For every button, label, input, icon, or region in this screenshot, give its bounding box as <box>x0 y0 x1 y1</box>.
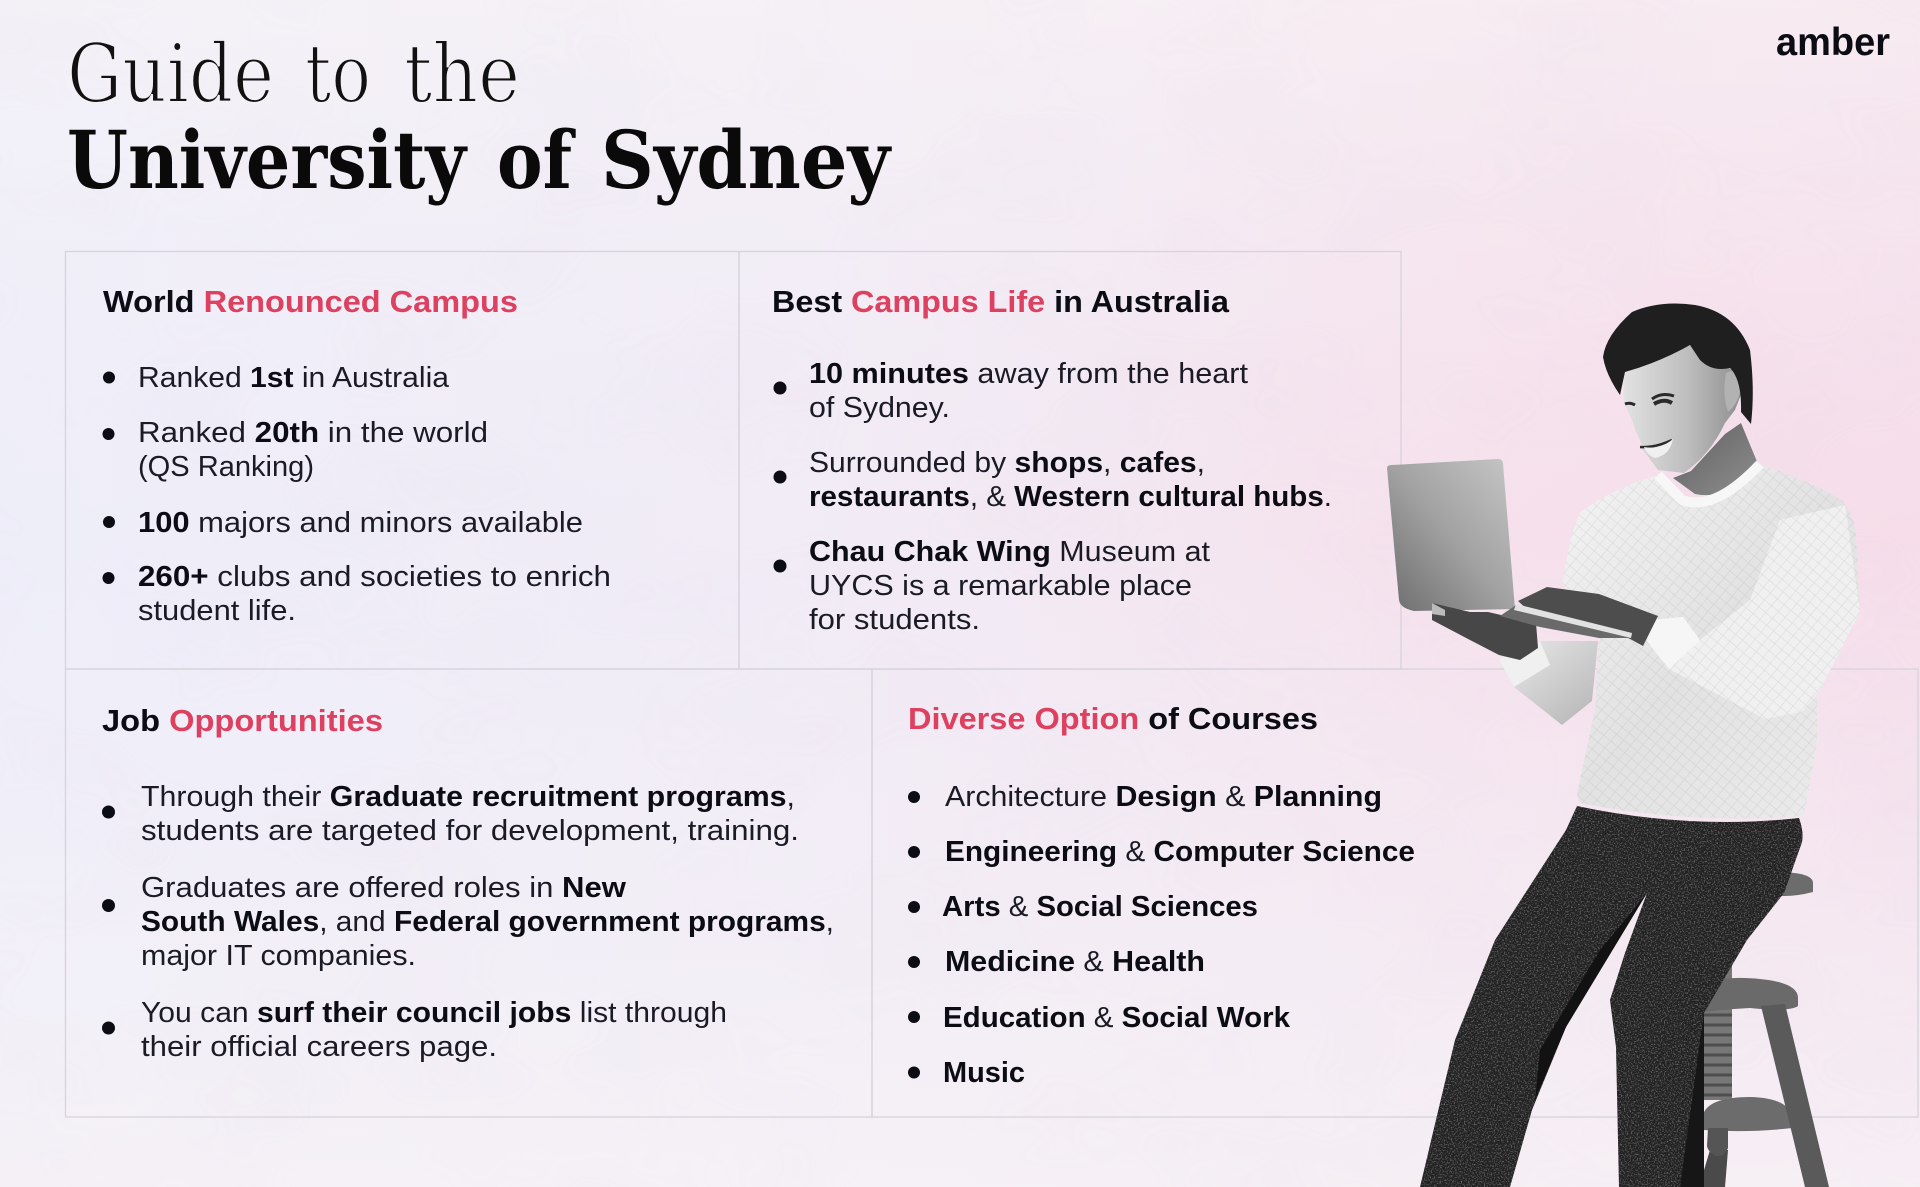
title: to <box>305 28 371 122</box>
item: Chau Chak Wing: for students. <box>809 604 980 636</box>
item: music <box>908 1057 1025 1089</box>
item: graduates roles: Graduates are offered roles in New <box>141 872 626 904</box>
panel: Diverse Option of Courses <box>872 669 1918 1117</box>
item: 260+ clubs <box>102 561 611 627</box>
heading: World Renounced Campus: World Renounced Campus <box>103 284 518 319</box>
title <box>67 28 892 207</box>
title: Sydney <box>601 113 892 207</box>
heading: Job Opportunities: Job Opportunities <box>102 703 383 738</box>
face details <box>1625 395 1674 447</box>
collar <box>1658 464 1760 502</box>
item: graduate recruitment: Through their Graduate recruitment programs , <box>141 781 795 813</box>
title: of <box>497 113 576 207</box>
item: 260+ clubs: student life. <box>138 595 296 627</box>
hair <box>1603 304 1753 424</box>
item: medicine: Medicine & Health <box>945 946 1205 978</box>
item: graduates roles: major IT companies. <box>141 940 416 972</box>
heading: Diverse Option of Courses: Diverse Option of Courses <box>908 701 1318 736</box>
item: ranked 20th: (QS Ranking) <box>138 451 314 483</box>
item: ranked 1st: Ranked 1st in Australia <box>138 362 450 394</box>
item: ranked 20th: Ranked 20th in the world <box>138 417 488 449</box>
panel: World Renounced Campus <box>66 252 739 669</box>
item: ranked 20th <box>102 417 488 483</box>
title: University <box>67 113 468 207</box>
panel: Best Campus Life <box>739 252 1401 669</box>
stool <box>1699 872 1829 1187</box>
sweater <box>1562 464 1860 819</box>
item: 100 majors: 100 majors and minors available <box>138 507 583 539</box>
neck <box>1673 423 1758 495</box>
title: the <box>404 28 520 122</box>
laptop screen <box>1387 459 1515 611</box>
item: Chau Chak Wing: UYCS is a remarkable place <box>809 570 1192 602</box>
item: 260+ clubs: 260+ clubs and societies to enrich <box>138 561 611 593</box>
title: Guide <box>67 28 274 122</box>
logo: amber: amber <box>1776 21 1890 64</box>
item: council jobs: their official careers page. <box>141 1031 497 1063</box>
item: surrounded by <box>774 447 1332 513</box>
typing hand <box>1518 587 1658 646</box>
item: graduates roles <box>102 872 834 972</box>
item: Chau Chak Wing: Chau Chak Wing Museum at <box>809 536 1210 568</box>
item: 10 minutes: of Sydney. <box>809 392 950 424</box>
right sleeve <box>1647 505 1860 719</box>
item: council jobs: You can surf their council jobs list through <box>141 997 727 1029</box>
item: surrounded by: restaurants, & Western cultural hubs. <box>809 481 1332 513</box>
item: graduates roles: South Wales, and Federal government programs , <box>141 906 834 938</box>
left arm sleeve <box>1499 641 1598 725</box>
item: graduate recruitment <box>102 781 799 847</box>
heading: Best Campus Life in Australia: Best Campus Life in Australia <box>772 284 1230 319</box>
item: music: Music <box>943 1057 1025 1089</box>
panel: Job Opportunities <box>66 669 872 1117</box>
item: 10 minutes <box>774 358 1248 424</box>
item: surrounded by: Surrounded by shops, cafes, <box>809 447 1205 479</box>
item: architecture: Architecture Design & Planning <box>945 781 1382 813</box>
item: arts: Arts & Social Sciences <box>942 891 1258 923</box>
item: 10 minutes: 10 minutes away from the heart <box>809 358 1248 390</box>
item: education: Education & Social Work <box>943 1002 1291 1034</box>
laptop base <box>1500 604 1632 638</box>
item: graduate recruitment: students are targeted for development, training. <box>141 815 799 847</box>
face <box>1624 340 1742 473</box>
supporting hand <box>1432 603 1538 660</box>
jeans <box>1420 806 1803 1187</box>
ear <box>1724 371 1741 412</box>
item: engineering: Engineering & Computer Science <box>945 836 1415 868</box>
person with laptop on stool <box>1387 304 1860 1187</box>
item: Chau Chak Wing <box>774 536 1210 636</box>
item: council jobs <box>102 997 727 1063</box>
